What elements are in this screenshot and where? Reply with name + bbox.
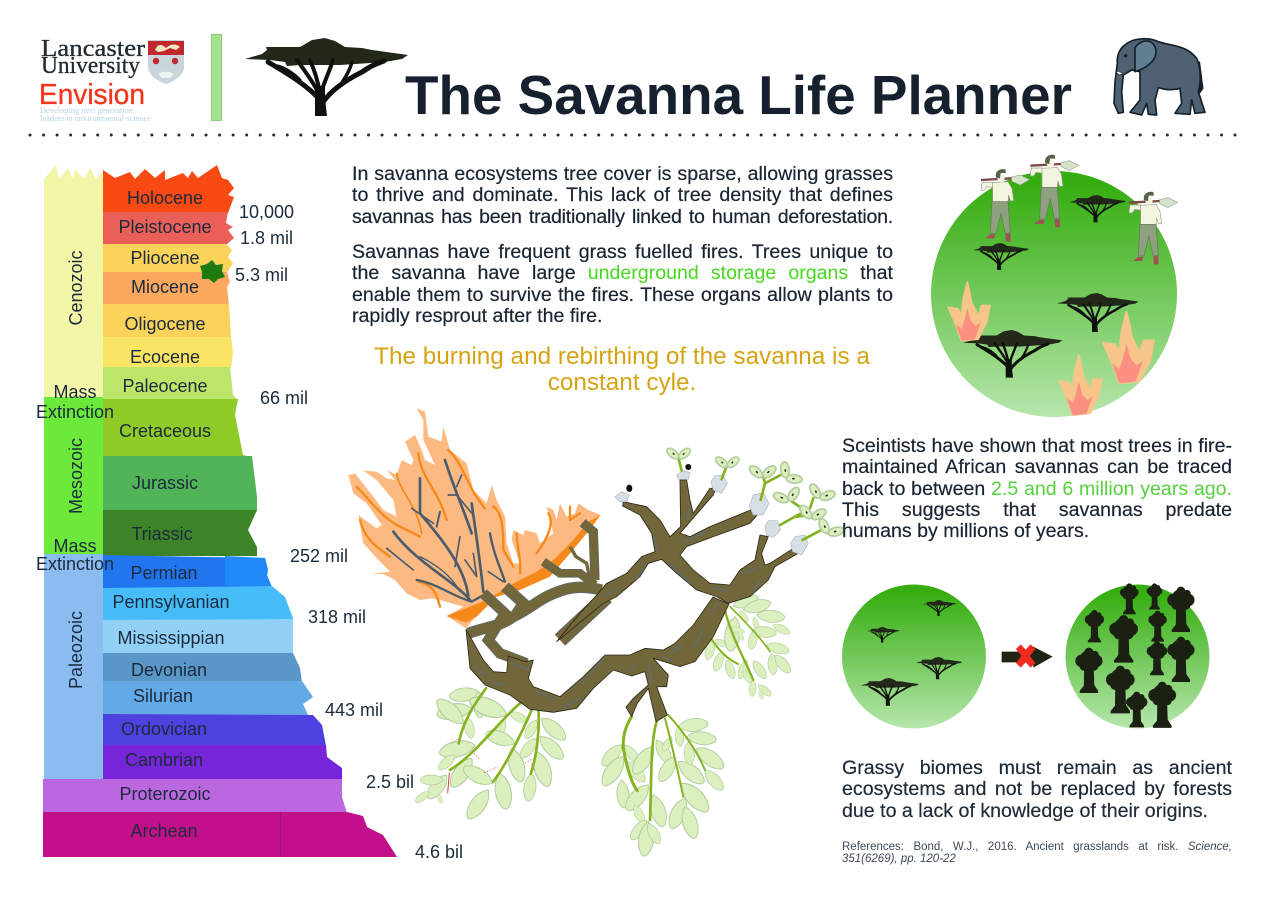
arrow with red cross	[1002, 644, 1053, 668]
text: fire paragraph: enable them to survive the fires. These organs allow plants to	[352, 284, 893, 306]
text: scientists paragraph: humans by millions of years.	[842, 520, 1089, 542]
age labels: 4.6 bil	[415, 842, 463, 862]
age labels: 10,000	[239, 202, 294, 222]
text: scientists paragraph	[842, 435, 1232, 542]
period layers	[43, 165, 397, 857]
age labels: 318 mil	[308, 607, 366, 627]
title: The Savanna Life Planner	[405, 64, 1072, 126]
text: intro paragraph	[352, 163, 893, 228]
circle: savanna with people, trees and fire	[931, 155, 1177, 417]
logo wordmark: Lancaster University	[41, 36, 145, 79]
era labels: Mass	[53, 382, 97, 402]
period labels: Silurian	[133, 686, 193, 706]
period labels: Pleistocene	[118, 217, 212, 237]
era labels: Cenozoic	[66, 250, 86, 326]
age labels: 5.3 mil	[235, 265, 288, 285]
leaf cluster: centre roots	[597, 715, 728, 857]
thin grey-edged branches	[468, 523, 607, 663]
age labels: 1.8 mil	[240, 228, 293, 248]
buds and sprouts	[615, 446, 847, 555]
people with shovels	[981, 155, 1177, 264]
geological timeline	[36, 165, 463, 862]
text: intro paragraph: to thrive and dominate. This lack of tree density that defines	[352, 184, 893, 206]
text: intro paragraph: In savanna ecosystems tree cover is sparse, allowing grasses	[352, 163, 893, 185]
period labels: Jurassic	[132, 473, 198, 493]
period labels: Archean	[130, 821, 198, 841]
logo: university shield	[148, 40, 184, 84]
age labels	[235, 202, 463, 862]
period labels: Ordovician	[121, 719, 207, 739]
era labels: Paleozoic	[66, 611, 86, 689]
period labels: Devonian	[131, 660, 207, 680]
age labels: 443 mil	[325, 700, 383, 720]
logo: Lancaster University Envision	[39, 36, 184, 123]
period labels: Ecocene	[130, 347, 200, 367]
era labels: Mesozoic	[66, 438, 86, 514]
text: scientists paragraph: This suggests that savannas predate	[842, 499, 1232, 521]
text: grassy biomes paragraph: ecosystems and not be replaced by forests	[842, 778, 1232, 800]
circle: sparse savanna	[842, 584, 986, 728]
period labels: Pennsylvanian	[112, 592, 230, 612]
text: grassy biomes paragraph: Grassy biomes must remain as ancient	[842, 757, 1232, 779]
period labels: Cambrian	[125, 750, 203, 770]
logo wordmark: Envision: Envision	[39, 79, 145, 111]
text: scientists paragraph: Sceintists have shown that most trees in fire-	[842, 435, 1232, 457]
callout: constant cycle: constant cyle.	[548, 369, 696, 396]
period labels: Paleocene	[122, 376, 208, 396]
period labels: Miocene	[131, 277, 199, 297]
icon: green star marker	[200, 260, 225, 283]
lower main limb	[466, 597, 729, 722]
period labels: Oligocene	[124, 314, 206, 334]
text: scientists paragraph: maintained African savannas can be traced	[842, 456, 1232, 478]
text: fire paragraph: rapidly resprout after the fire.	[352, 305, 602, 327]
callout: constant cycle	[374, 343, 870, 396]
age labels: 252 mil	[290, 546, 348, 566]
icon: acacia tree header	[245, 38, 408, 116]
logo tagline: leaders in environmental science	[40, 113, 151, 123]
age labels: 2.5 bil	[366, 772, 414, 792]
period labels: Permian	[130, 563, 198, 583]
callout: constant cycle: The burning and rebirthing of the savanna is a	[374, 343, 870, 370]
period labels: Mississippian	[117, 628, 225, 648]
text: intro paragraph: savannas has been traditionally linked to human deforestation.	[352, 206, 893, 228]
period labels: Triassic	[131, 524, 193, 544]
era column: Paleozoic	[44, 554, 103, 779]
text: fire paragraph: the savanna have large underground storage organs that	[352, 262, 893, 284]
text: fire paragraph: Savannas have frequent grass fuelled fires. Trees unique to	[352, 241, 893, 263]
illustration: burning and resprouting tree	[348, 408, 847, 857]
text: fire paragraph	[352, 241, 893, 327]
era column: Mesozoic	[44, 397, 103, 555]
circle: forest replacement	[1066, 583, 1210, 728]
fires	[948, 282, 1154, 415]
icon: elephant	[1114, 39, 1205, 115]
text: references: 351(6269), pp. 120-22	[842, 853, 956, 865]
logo wordmark: Lancaster University: University	[41, 53, 140, 79]
text: references	[842, 841, 1232, 865]
savanna trees	[963, 195, 1138, 378]
period labels: Cretaceous	[119, 421, 211, 441]
green divider bar	[212, 34, 222, 120]
period labels: Proterozoic	[119, 784, 211, 804]
age labels: 66 mil	[260, 388, 308, 408]
era labels: Extinction	[36, 402, 114, 422]
text: references: References: Bond, W.J., 2016. Ancient grasslands at risk. Science,	[842, 841, 1232, 853]
logo tagline	[40, 105, 151, 123]
upper right trunk with branches	[557, 480, 798, 642]
dotted divider	[30, 134, 1238, 136]
text: grassy biomes paragraph	[842, 757, 1232, 822]
leaf cluster: left roots	[413, 686, 569, 823]
period labels: Holocene	[127, 188, 203, 208]
fire on the left branches	[348, 408, 601, 628]
period labels: Pliocene	[130, 248, 200, 268]
tree branches	[466, 446, 847, 722]
period labels	[112, 188, 230, 841]
text: grassy biomes paragraph: due to a lack of knowledge of their origins.	[842, 800, 1208, 822]
era labels: Extinction	[36, 554, 114, 574]
leaf cluster: right roots	[703, 592, 794, 700]
logo tagline: Developing next generation	[40, 105, 134, 115]
era column: Cenozoic	[44, 165, 103, 398]
logo wordmark: Lancaster University: Lancaster	[41, 36, 145, 62]
era labels: Mass	[53, 536, 97, 556]
text: scientists paragraph: back to between 2.5 and 6 million years ago.	[842, 478, 1232, 500]
era labels	[36, 250, 114, 689]
